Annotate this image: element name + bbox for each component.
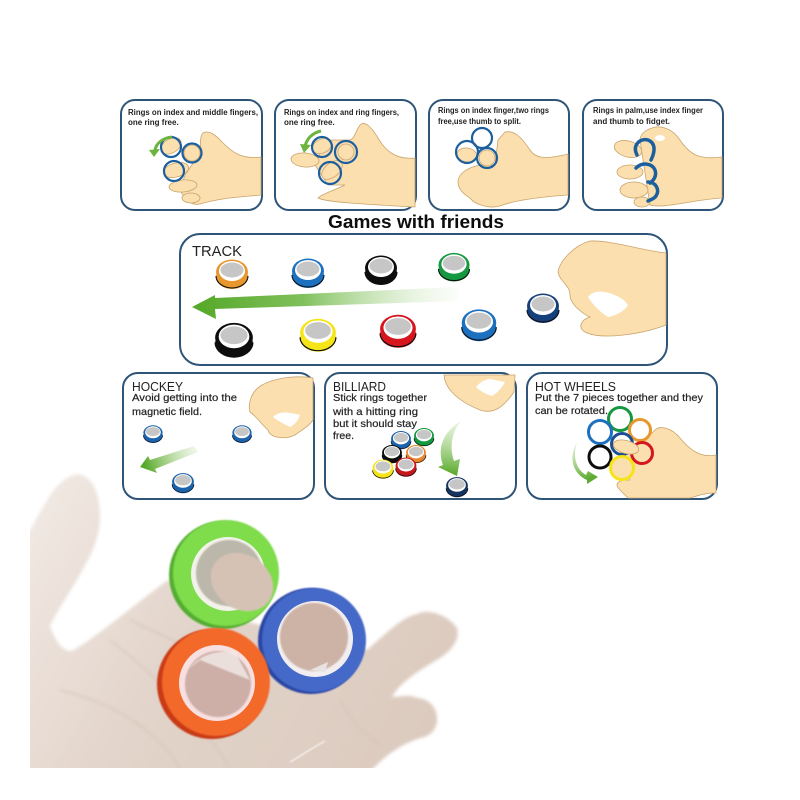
- heading: games with friends: Games with friends: [328, 211, 504, 232]
- rings: [312, 137, 357, 184]
- text block: HOCKEY: [132, 380, 184, 394]
- rings: [635, 140, 658, 201]
- blue ring: [258, 588, 366, 694]
- hand illustration: [290, 123, 415, 207]
- text block: [535, 380, 704, 417]
- caption: Rings on index and ring fingers,: [284, 108, 399, 117]
- hand illustration: [612, 127, 722, 207]
- photo: hand holding magnetic rings: [20, 474, 458, 775]
- text block: [132, 380, 237, 418]
- green arrow: [572, 442, 598, 484]
- hand: [444, 375, 515, 411]
- text block: [332, 380, 428, 442]
- panel: hockey: [123, 373, 314, 499]
- rings: [143, 425, 252, 493]
- text block: free.: [333, 430, 354, 442]
- caption: one ring free.: [128, 118, 179, 127]
- hand: [20, 474, 458, 775]
- caption: free,use thumb to split.: [438, 117, 521, 126]
- text block: Avoid getting into the: [132, 392, 237, 404]
- green ring: [169, 520, 285, 629]
- rings cluster: [373, 428, 468, 497]
- caption: Rings on index finger,two rings: [438, 106, 550, 115]
- text block: with a hitting ring: [332, 406, 418, 418]
- icon: green arrow: [300, 131, 321, 153]
- icon: green arrow: [149, 137, 172, 157]
- panel: index and middle fingers: [121, 100, 262, 210]
- hand: [617, 428, 716, 498]
- panel: hot wheels: [527, 373, 717, 499]
- green arrow: [438, 421, 461, 476]
- caption: and thumb to fidget.: [593, 117, 670, 126]
- panel: billiard: [325, 373, 516, 499]
- caption: one ring free.: [284, 118, 335, 127]
- caption: Rings on index and middle fingers,: [128, 108, 258, 117]
- hand: [558, 241, 666, 336]
- rings row: [215, 253, 559, 358]
- hand illustration: [456, 132, 568, 207]
- text block: Stick rings together: [333, 392, 428, 404]
- text block: magnetic field.: [132, 406, 202, 418]
- text block: Put the 7 pieces together and they: [535, 392, 704, 404]
- panel: index and ring fingers: [275, 100, 416, 210]
- green arrow: [192, 287, 458, 319]
- text block: can be rotated.: [535, 405, 608, 417]
- panel: track: [180, 234, 667, 365]
- orange ring: [157, 628, 270, 739]
- hand: [249, 377, 313, 438]
- caption: Rings in palm,use index finger: [593, 106, 703, 115]
- rings: [456, 128, 497, 168]
- panel: palm fidget: [583, 100, 723, 210]
- text block: HOT WHEELS: [535, 380, 616, 394]
- panel: thumb split: [429, 100, 569, 210]
- rings: [588, 408, 652, 480]
- label: track: TRACK: [192, 243, 242, 260]
- text block: but it should stay: [333, 418, 418, 430]
- infographic instructions: [121, 100, 723, 499]
- thumb: [612, 437, 640, 457]
- green arrow: [140, 446, 198, 473]
- rings: [161, 137, 202, 181]
- text block: BILLIARD: [333, 380, 386, 394]
- hand illustration: [158, 132, 261, 204]
